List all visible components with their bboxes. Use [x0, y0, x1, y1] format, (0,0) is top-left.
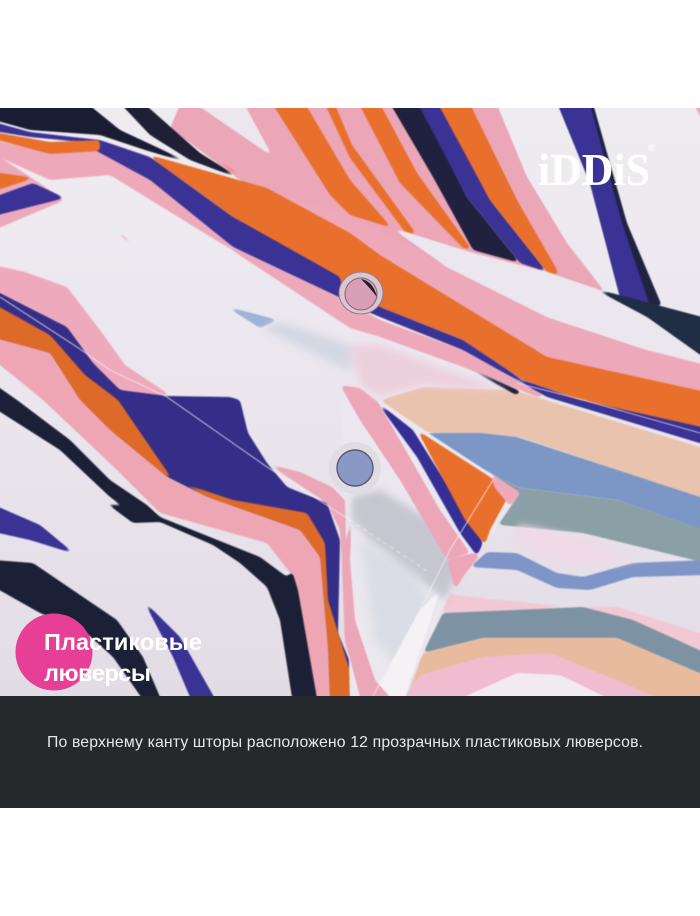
flap shadow	[352, 490, 460, 670]
bottom caption band	[0, 696, 700, 808]
metal grommet, bottom	[329, 442, 381, 494]
badge title second line: люверсы	[44, 660, 151, 686]
lower left stripes: pink, navy, orange and black lines	[0, 265, 396, 704]
pale fold highlights	[232, 308, 274, 328]
infographic page	[0, 108, 700, 808]
product photo: patterned curtain fabric	[0, 100, 700, 704]
badge title: Пластиковые	[44, 629, 202, 655]
registered mark: ®	[648, 143, 655, 153]
logo: IDDIS: iDDiS	[538, 144, 650, 195]
caption text: По верхнему канту шторы расположено 12 прозрачных пластиковых люверсов.	[47, 734, 643, 751]
back curtain stripes, lower right	[380, 387, 700, 704]
upper front hem: orange, pink and navy bands	[0, 100, 700, 445]
stitching seams	[0, 297, 700, 696]
badge: pink circle with title	[16, 614, 202, 690]
flap hem and stripes	[340, 385, 521, 704]
back curtain stripes, upper	[170, 100, 700, 306]
metal grommet, top	[339, 272, 383, 314]
pale tints	[262, 322, 640, 565]
folded corner flap base	[344, 433, 516, 696]
left corner wedge stripes	[0, 157, 128, 241]
